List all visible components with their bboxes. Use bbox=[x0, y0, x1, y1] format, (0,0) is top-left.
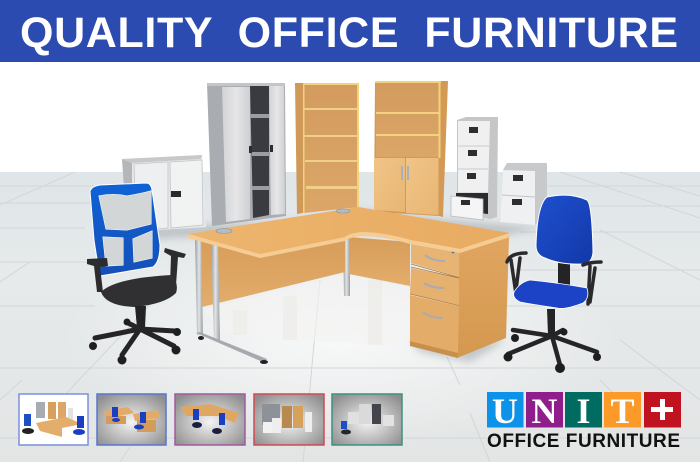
thumbnail 3: curved desks bbox=[175, 394, 245, 445]
tiled floor bbox=[0, 172, 700, 462]
tambour tall cupboard bbox=[207, 83, 286, 226]
white backdrop wall bbox=[0, 62, 700, 172]
star base bbox=[95, 323, 175, 355]
back cushion bbox=[536, 195, 593, 264]
tile I bbox=[565, 391, 602, 431]
gas column bbox=[135, 306, 146, 328]
low white cupboard bbox=[122, 155, 206, 232]
arms bbox=[507, 253, 601, 304]
seat bbox=[514, 280, 588, 308]
thumbnail 4: storage bbox=[254, 394, 324, 445]
header banner bbox=[0, 0, 700, 62]
column bbox=[547, 309, 555, 335]
left steel legs bbox=[195, 239, 268, 364]
star base bbox=[508, 330, 597, 365]
desk top bbox=[188, 207, 510, 254]
company logo bbox=[487, 391, 681, 452]
title: QUALITY OFFICE FURNITURE bbox=[20, 9, 678, 57]
tile U: U bbox=[492, 391, 518, 431]
mesh windows bbox=[99, 191, 152, 266]
seat bbox=[101, 275, 177, 307]
tile plus bbox=[644, 392, 681, 428]
logo strapline: OFFICE FURNITURE bbox=[487, 431, 680, 452]
short filing cabinet bbox=[500, 163, 547, 225]
black arms bbox=[87, 248, 186, 292]
mesh back bbox=[90, 183, 160, 276]
blue mesh office chair bbox=[87, 183, 186, 364]
tile T bbox=[604, 391, 641, 431]
casters bbox=[504, 328, 601, 373]
modesty panel right bbox=[349, 237, 410, 286]
open bookcase bbox=[295, 83, 359, 214]
modesty panel left bbox=[201, 238, 345, 307]
furniture soft shadows bbox=[125, 210, 545, 362]
tile T: T bbox=[610, 391, 635, 431]
rear steel leg bbox=[343, 237, 350, 296]
corner desk bbox=[188, 207, 510, 364]
thumbnail 5: metal cupboards bbox=[332, 394, 402, 445]
thumbnail strip bbox=[19, 394, 402, 445]
bookcase with doors bbox=[374, 81, 448, 217]
casters bbox=[89, 318, 181, 364]
pedestal side bbox=[457, 237, 509, 358]
thumbnail 1: complete range bbox=[19, 394, 88, 445]
tile I: I bbox=[576, 391, 591, 431]
tall filing cabinet bbox=[451, 117, 498, 220]
cable grommets bbox=[216, 209, 350, 234]
blue task chair bbox=[504, 195, 601, 373]
tile N: N bbox=[532, 391, 558, 431]
thumbnail 2: desks bbox=[97, 394, 166, 445]
spine bbox=[558, 260, 570, 286]
pedestal drawers bbox=[410, 242, 459, 358]
